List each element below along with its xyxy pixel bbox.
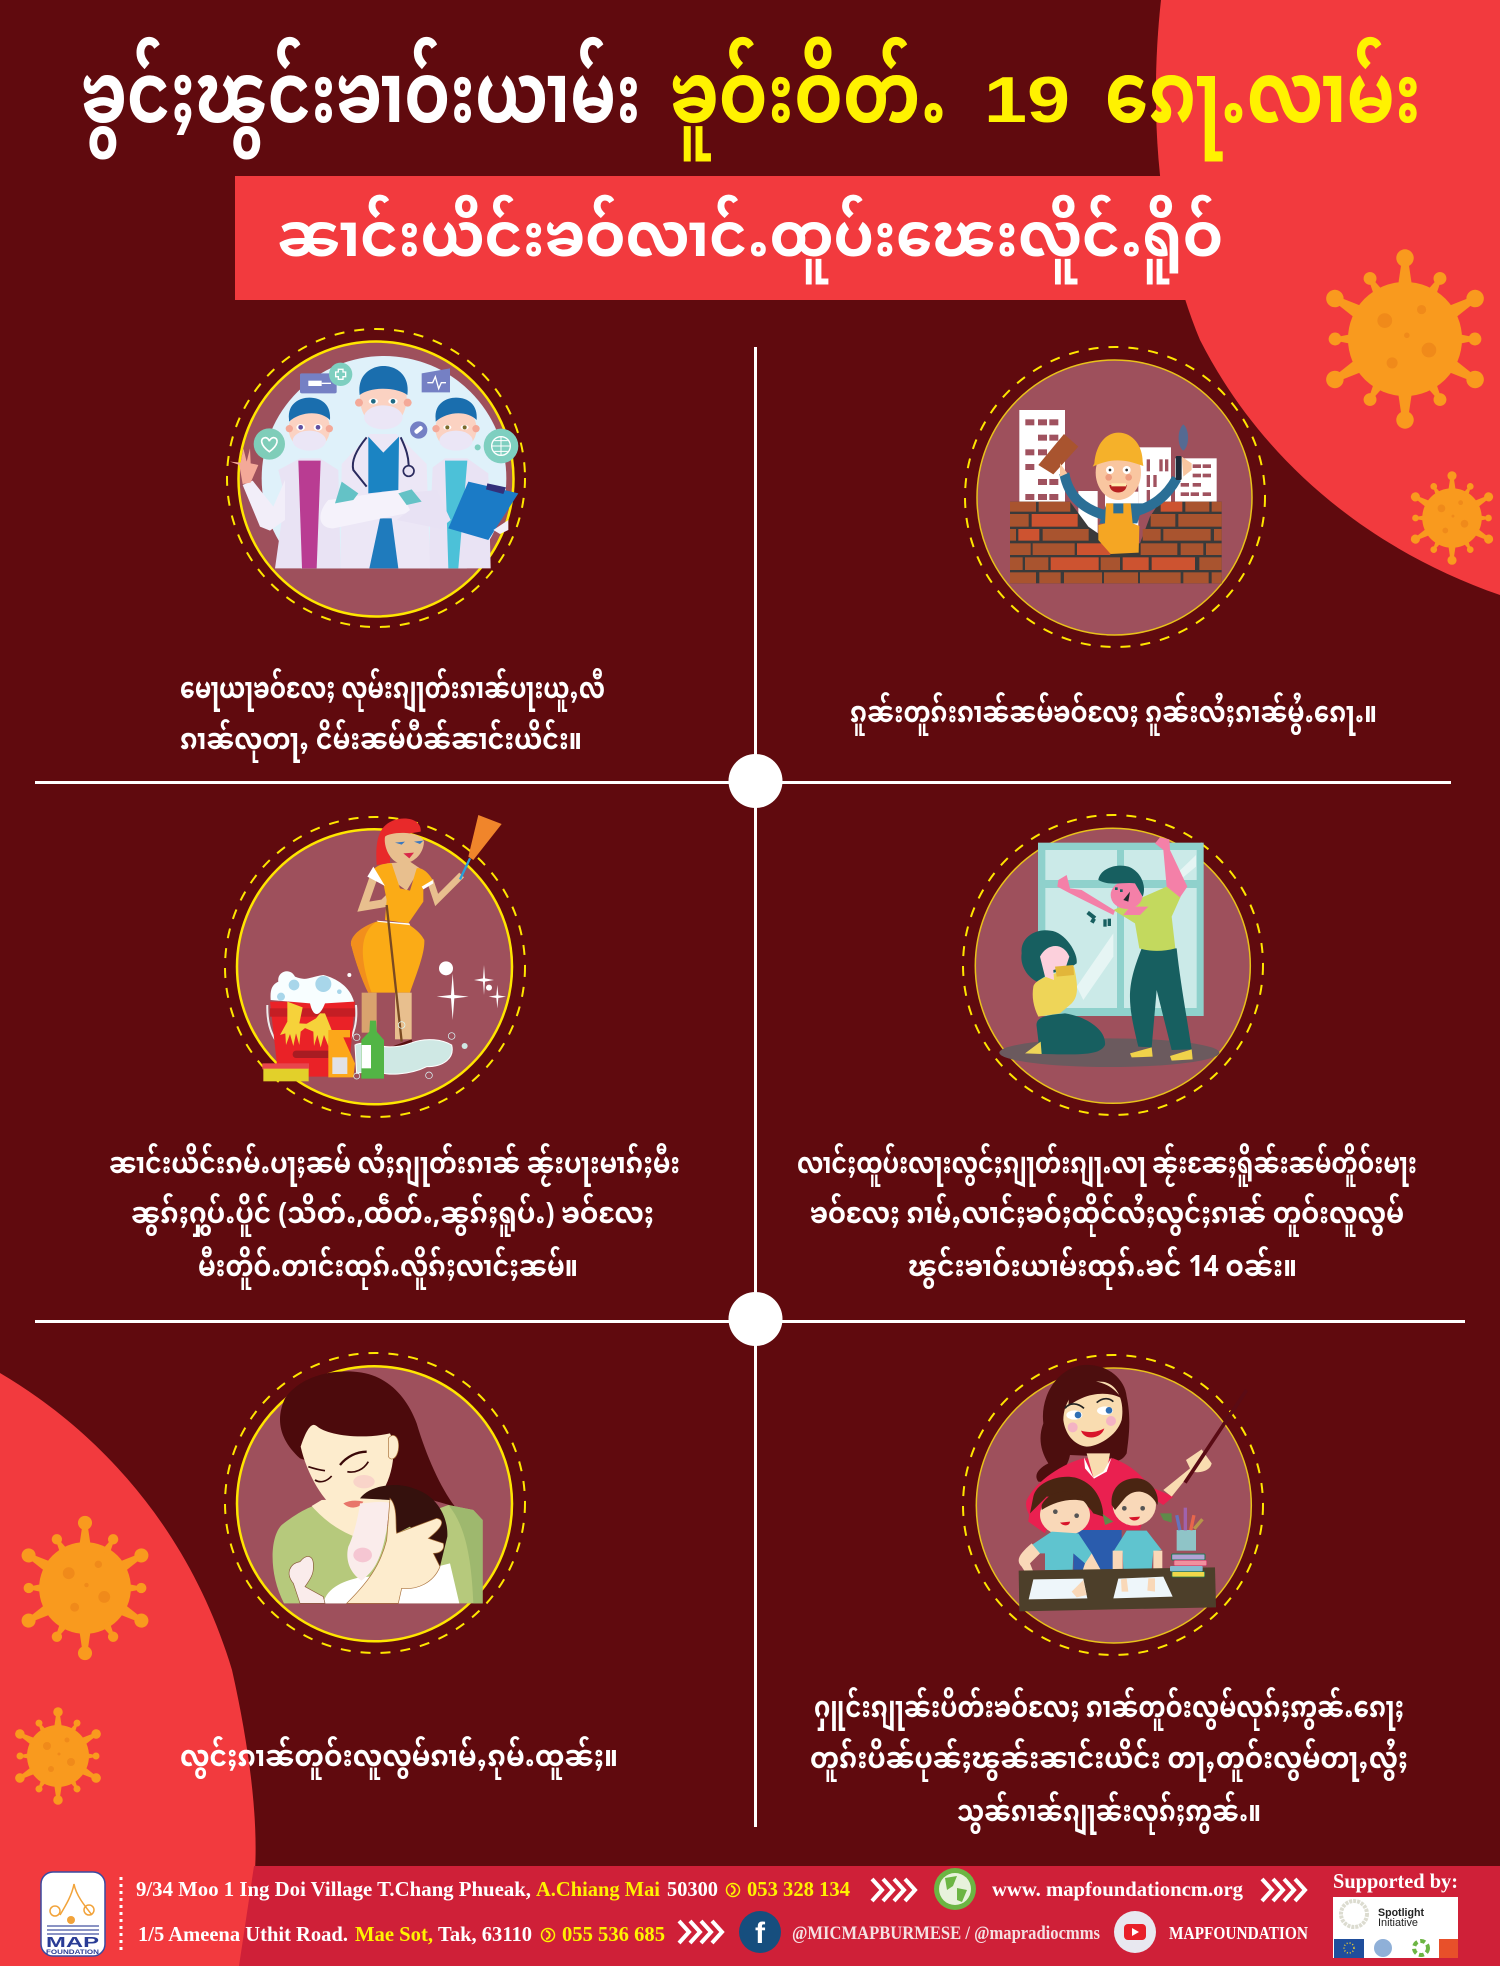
panel: schools closed [810, 1355, 1408, 1847]
social handles: @MICMAPBURMESE / @mapradiocmms [792, 1923, 1100, 1944]
text block: ၽွင်းၶၢဝ်းယၢမ်းထုၵ်ႉၶင် 14 ဝၼ်း။ [908, 1236, 1297, 1302]
supporters: Spotlight [1378, 1907, 1424, 1919]
panel: domestic violence [797, 815, 1417, 1302]
text block: ၵၢၼ်လုတႃႇ ငိမ်းၼမ်ပီၼ်ၼၢင်းယိင်း။ [180, 709, 582, 775]
icon ring and teacher illustration [963, 1355, 1263, 1655]
icon: facebook: f [755, 1917, 766, 1950]
icon: youtube [1114, 1911, 1156, 1953]
icon ring and couple illustration [963, 815, 1263, 1115]
youtube name: MAPFOUNDATION [1169, 1923, 1308, 1943]
chevrons arrow [1262, 1879, 1305, 1901]
title: 19 [984, 63, 1070, 136]
panel: domestic workers [109, 815, 680, 1302]
supporters [1333, 1869, 1458, 1958]
title [81, 12, 1421, 195]
contact line 1: 053 328 134 [747, 1877, 850, 1901]
title: ၵေႃႉလၢမ်း [1105, 12, 1421, 195]
contact line 2: Tak, 63110 [438, 1922, 532, 1946]
icon ring and mother illustration [225, 1353, 525, 1653]
MAP Foundation logo: FOUNDATION [46, 1949, 99, 1956]
contact line 2: Mae Sot, [355, 1922, 433, 1946]
supporters: Initiative [1378, 1917, 1418, 1929]
virus icon small bottom left [13, 1707, 103, 1805]
contact line 1: 50300 [667, 1877, 718, 1901]
contact line 1 [136, 1877, 850, 1901]
decorative red shape top right [1156, 0, 1500, 595]
contact line 2: 055 536 685 [562, 1922, 665, 1946]
contact line 2 [138, 1922, 665, 1946]
title: ၶွင်ႈၽွင်းၶၢဝ်းယၢမ်း [81, 12, 641, 195]
decorative red shape bottom left [0, 1373, 256, 1966]
text block: လွင်ႈၵၢၼ်တူဝ်းလူလွမ်ၵၢမ်ႇၵုမ်ႉထူၼ်ႈ။ [180, 1726, 618, 1792]
contact line 1: A.Chiang Mai [536, 1877, 660, 1901]
text block: မေႃယႃၶဝ်လႄႈ လုမ်းၵျႃတ်းၵၢၼ်ပႃးယူႇလီ [180, 658, 605, 724]
text block: ၼွၵ်ႈႁွပ်ႉပိူင် (သိတ်ႉ,ထဵတ်ႉ,ၼွၵ်ႈရူပ်ႉ) ၶဝ်လႄႈ [131, 1183, 654, 1249]
icon: globe [934, 1868, 976, 1910]
virus icon small top right [1409, 471, 1495, 565]
virus icon large top right [1323, 249, 1487, 429]
supporters: Supported by: [1333, 1869, 1458, 1893]
text block: တူၵ်းပိၼ်ပုၼ်ႈၽွၼ်းၼၢင်းယိင်း တႃႇတူဝ်းလွမ်တႃႇလွႆႈ [810, 1728, 1408, 1794]
title: ၶူဝ်းဝိတ်ႉ [670, 12, 947, 195]
text block [180, 658, 605, 775]
MAP Foundation logo [41, 1872, 105, 1956]
contact line 1: 9/34 Moo 1 Ing Doi Village T.Chang Phueak, [136, 1877, 531, 1901]
subtitle banner: ၼၢင်းယိင်းၶဝ်လၢင်ႉထူပ်းၽေးလိူင်ႉရိူဝ် [277, 176, 1223, 309]
chevrons arrow [872, 1879, 915, 1901]
MAP Foundation logo: MAP [46, 1934, 99, 1951]
grid divider lines and circles [35, 347, 1465, 1827]
panel: construction workers [850, 347, 1377, 748]
panel: health workers [180, 329, 605, 775]
icon: facebook [739, 1911, 781, 1953]
website: www. mapfoundationcm.org [992, 1877, 1243, 1901]
chevrons arrow [679, 1921, 722, 1943]
text block [109, 1133, 680, 1302]
icon ring and bricklayer illustration [965, 347, 1265, 647]
panel: mothers and childcare [180, 1353, 618, 1792]
text block: ၼၢင်းယိင်းၵမ်ႉပႃႈၼမ် လႆႈၵျႃတ်းၵၢၼ် ၼႂ်းပႃးမၢၵ်ႈမီး [109, 1133, 680, 1199]
text block: သွၼ်ၵၢၼ်ၵျႃၼ်းလုၵ်ႈဢွၼ်ႉ။ [957, 1781, 1261, 1847]
text block: ၵူၼ်းတူၵ်းၵၢၼ်ၼမ်ၶဝ်လႄႈ ၵူၼ်းလႆႈၵၢၼ်မွႆႉၵေႃႉ။ [850, 682, 1377, 748]
virus icon large bottom left [19, 1516, 151, 1660]
text block: မီးတိူဝ်ႉတၢင်းထုၵ်ႉလိူၵ်ႈလၢင်ႈၼမ်။ [198, 1236, 578, 1302]
icon ring and doctors illustration [227, 329, 525, 627]
text block [810, 1677, 1408, 1847]
contact line 2: 1/5 Ameena Uthit Road. [138, 1922, 348, 1946]
icon ring and cleaner illustration [225, 815, 525, 1117]
text block: ၶဝ်လႄႈ ၵၢမ်ႇလၢင်ႈၶဝ်ႈထိုင်လႆႈလွင်ႈၵၢၼ် တူဝ်းလူလွမ် [810, 1183, 1404, 1249]
text block [797, 1133, 1417, 1302]
footer [41, 1866, 1500, 1966]
footer band [239, 1866, 1500, 1966]
